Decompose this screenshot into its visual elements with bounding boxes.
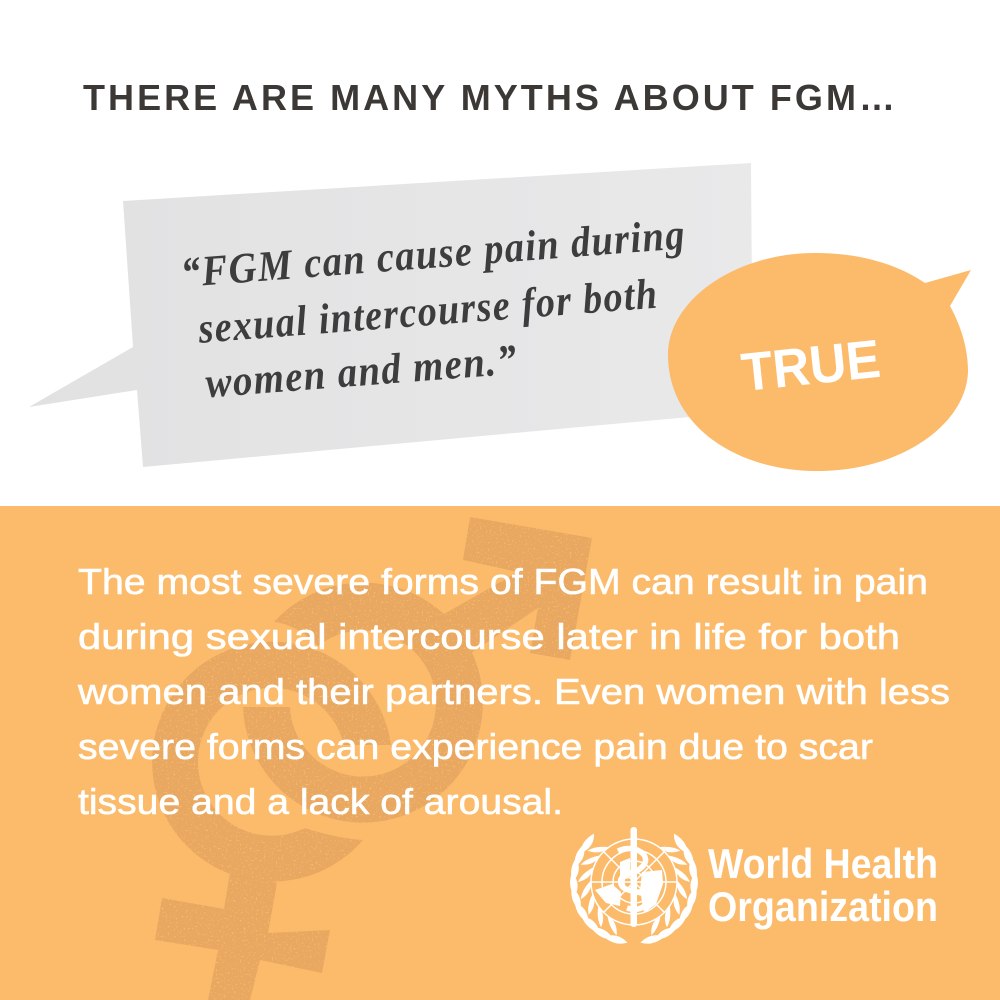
icon: interlocked gender symbols bbox=[152, 517, 592, 1000]
panel: orange explanation background bbox=[0, 506, 1000, 1000]
explanation text block: tissue and a lack of arousal. bbox=[78, 781, 563, 822]
organization name bbox=[708, 840, 938, 930]
panel: TRUE answer bubble bbox=[668, 253, 971, 471]
organization name: Organization bbox=[708, 883, 938, 930]
explanation text block: severe forms can experience pain due to scar bbox=[78, 726, 873, 767]
right laurel branch bbox=[640, 831, 701, 945]
grey bubble shape with tail bbox=[29, 163, 752, 467]
myth quote text: sexual intercourse for both bbox=[196, 271, 660, 353]
left laurel branch bbox=[567, 831, 628, 945]
panel: myth speech bubble bbox=[29, 163, 752, 467]
orange bubble with tail bbox=[668, 253, 971, 471]
explanation text block: during sexual intercourse later in life for both bbox=[78, 616, 900, 657]
explanation text block: women and their partners. Even women with less bbox=[77, 671, 950, 712]
organization name: World Health bbox=[708, 840, 938, 887]
icon: WHO emblem bbox=[567, 827, 701, 945]
icon: female symbol bbox=[152, 642, 391, 1000]
myth quote text: “FGM can cause pain during bbox=[179, 211, 687, 297]
icon: male symbol bbox=[243, 517, 592, 823]
title: THERE ARE MANY MYTHS ABOUT FGM… bbox=[83, 77, 895, 118]
myth quote text: women and men.” bbox=[204, 337, 520, 407]
explanation text block: The most severe forms of FGM can result in pain bbox=[78, 561, 928, 602]
logo: World Health Organization bbox=[567, 827, 938, 945]
myth quote text bbox=[179, 211, 696, 409]
globe grid bbox=[591, 839, 677, 925]
staff and serpent bbox=[618, 827, 647, 927]
explanation text block bbox=[77, 561, 950, 822]
white top background bbox=[0, 0, 1000, 506]
continents bbox=[595, 858, 663, 913]
answer label: TRUE bbox=[739, 329, 883, 403]
